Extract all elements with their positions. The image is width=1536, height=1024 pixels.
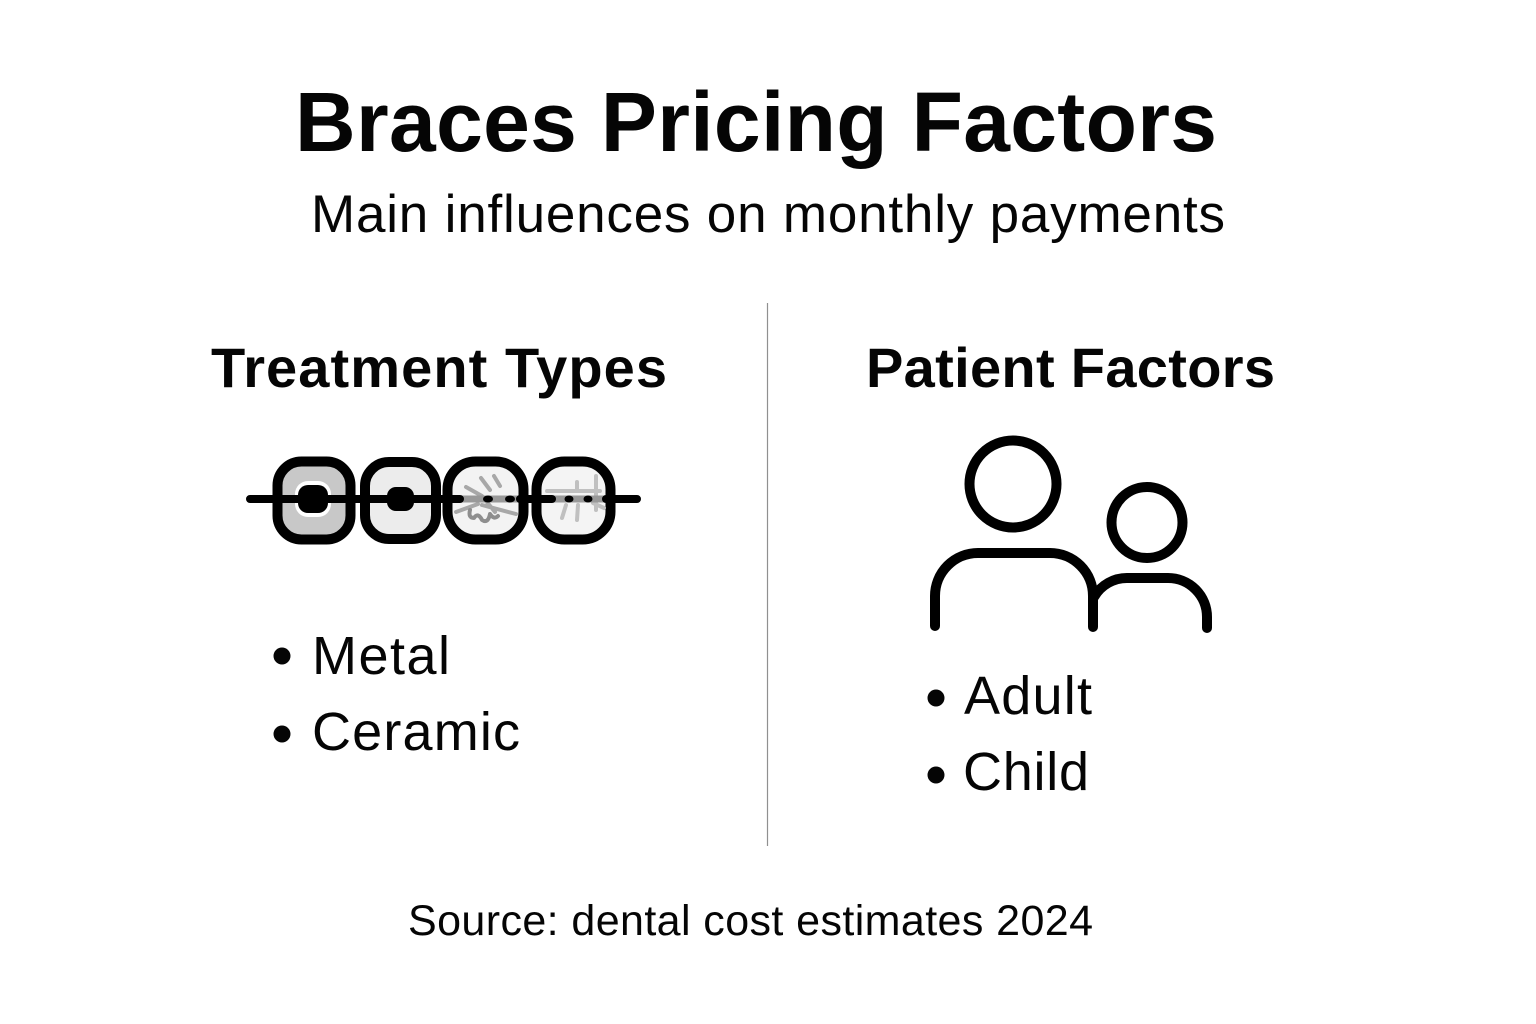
bullet list: patient factors [928, 666, 1092, 802]
title: Braces Pricing Factors [295, 75, 1217, 169]
icon: braces [250, 462, 637, 540]
bullet list: treatment types: Ceramic [312, 702, 520, 762]
panel: treatment types [211, 336, 667, 762]
bullet list: patient factors: Child [963, 742, 1089, 802]
subtitle: Main influences on monthly payments [311, 185, 1225, 244]
bullet list: treatment types [274, 626, 520, 762]
panel: patient factors [866, 336, 1275, 802]
bullet list: patient factors: Adult [964, 666, 1092, 726]
bullet list: treatment types: Metal [312, 626, 450, 686]
heading: treatment types: Treatment Types [211, 336, 667, 399]
icon: adult and child [935, 440, 1207, 628]
source note: Source: dental cost estimates 2024 [408, 897, 1093, 945]
heading: patient factors: Patient Factors [866, 336, 1275, 399]
